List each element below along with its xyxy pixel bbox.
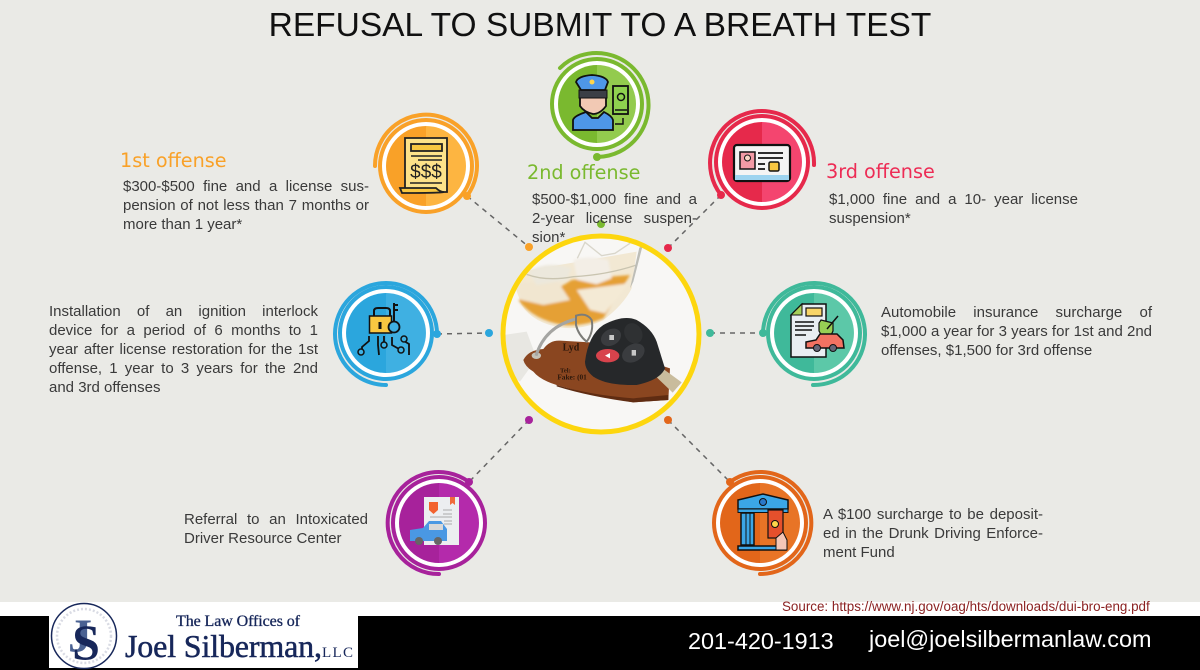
icon badge: bank and money <box>714 472 811 574</box>
text: 3rd offense penalties: suspension* <box>829 210 911 227</box>
text: 1st offense penalties: more than 1 year* <box>123 216 242 233</box>
text: 2nd offense penalties: sion* <box>532 229 565 246</box>
central photo: drink and car keys <box>500 235 700 435</box>
icon badge: 1st offense fine document <box>375 115 477 212</box>
text: 2nd offense penalties <box>532 191 697 246</box>
text: ignition interlock: year after license restoration for the 1st <box>49 341 318 358</box>
footer black bar <box>0 616 1200 670</box>
icon badge: 1st offense fine document: $$$ <box>410 162 442 183</box>
icon badge: 3rd offense license card <box>710 111 814 208</box>
central photo: drink and car keys: Lyd <box>563 342 580 353</box>
text: 1st offense penalties <box>123 178 369 233</box>
text: insurance surcharge: $1,000 a year for 3 years for 1st and 2nd <box>881 323 1152 340</box>
logo emblem: J <box>68 610 92 663</box>
text: ignition interlock: Installation of an ignition interlock <box>49 303 318 320</box>
icon badge: 2nd offense police officer and cash <box>552 53 649 161</box>
logo emblem <box>52 604 116 670</box>
text: 1st offense penalties: $300-$500 fine and a license sus- <box>123 178 369 195</box>
text: ignition interlock: offense, 1 year to 3 years for the 2nd <box>49 360 318 377</box>
text: enforcement fund surcharge <box>823 506 1043 561</box>
heading: 1st offense: 1st offense <box>120 149 227 172</box>
text: resource center referral: Driver Resource Center <box>184 530 342 547</box>
central photo: drink and car keys: Fake: (01 <box>557 372 587 381</box>
source citation: Source: https://www.nj.gov/oag/hts/downloads/dui-bro-eng.pdf <box>782 599 1150 614</box>
text: 2nd offense penalties: 2-year license suspen- <box>532 210 697 227</box>
text: ignition interlock: and 3rd offenses <box>49 379 160 396</box>
text: ignition interlock <box>49 303 318 396</box>
icon badge: resource center document and car <box>388 472 485 574</box>
text: resource center referral <box>184 511 368 547</box>
email address: joel@joelsilbermanlaw.com <box>869 626 1151 652</box>
text: 1st offense penalties: pension of not less than 7 months or <box>123 197 369 214</box>
text: resource center referral: Referral to an Intoxicated <box>184 511 368 528</box>
icon badge: insurance document and car <box>759 283 865 385</box>
logo LLC: LLC <box>322 645 353 661</box>
heading: 2nd offense: 2nd offense <box>527 161 640 184</box>
text: enforcement fund surcharge: ed in the Drunk Driving Enforce- <box>823 525 1043 542</box>
icon badge: ignition interlock lock and key <box>335 283 441 385</box>
hub dots <box>485 220 714 424</box>
text: insurance surcharge: Automobile insurance surcharge of <box>881 304 1152 321</box>
central photo: drink and car keys: Tel: <box>560 367 571 374</box>
title: REFUSAL TO SUBMIT TO A BREATH TEST <box>269 7 931 44</box>
text: 3rd offense penalties: $1,000 fine and a 10- year license <box>829 191 1078 208</box>
text: 3rd offense penalties <box>829 191 1078 227</box>
connector lines <box>437 195 763 482</box>
logo emblem: S <box>72 614 100 670</box>
text: ignition interlock: device for a period of 6 months to 1 <box>49 322 318 339</box>
text: 2nd offense penalties: $500-$1,000 fine and a <box>532 191 697 208</box>
logo firm name: The Law Offices of <box>176 613 301 630</box>
text: insurance surcharge <box>881 304 1152 359</box>
logo firm name large: Joel Silberman, <box>125 628 322 664</box>
footer white strip <box>0 602 1200 616</box>
heading: 3rd offense: 3rd offense <box>826 160 935 183</box>
text: insurance surcharge: offenses, $1,500 for 3rd offense <box>881 342 1092 359</box>
logo panel <box>49 603 358 670</box>
phone number: 201-420-1913 <box>688 628 834 654</box>
text: enforcement fund surcharge: A $100 surcharge to be deposit- <box>823 506 1043 523</box>
text: enforcement fund surcharge: ment Fund <box>823 544 895 561</box>
yellow ring <box>503 236 699 432</box>
